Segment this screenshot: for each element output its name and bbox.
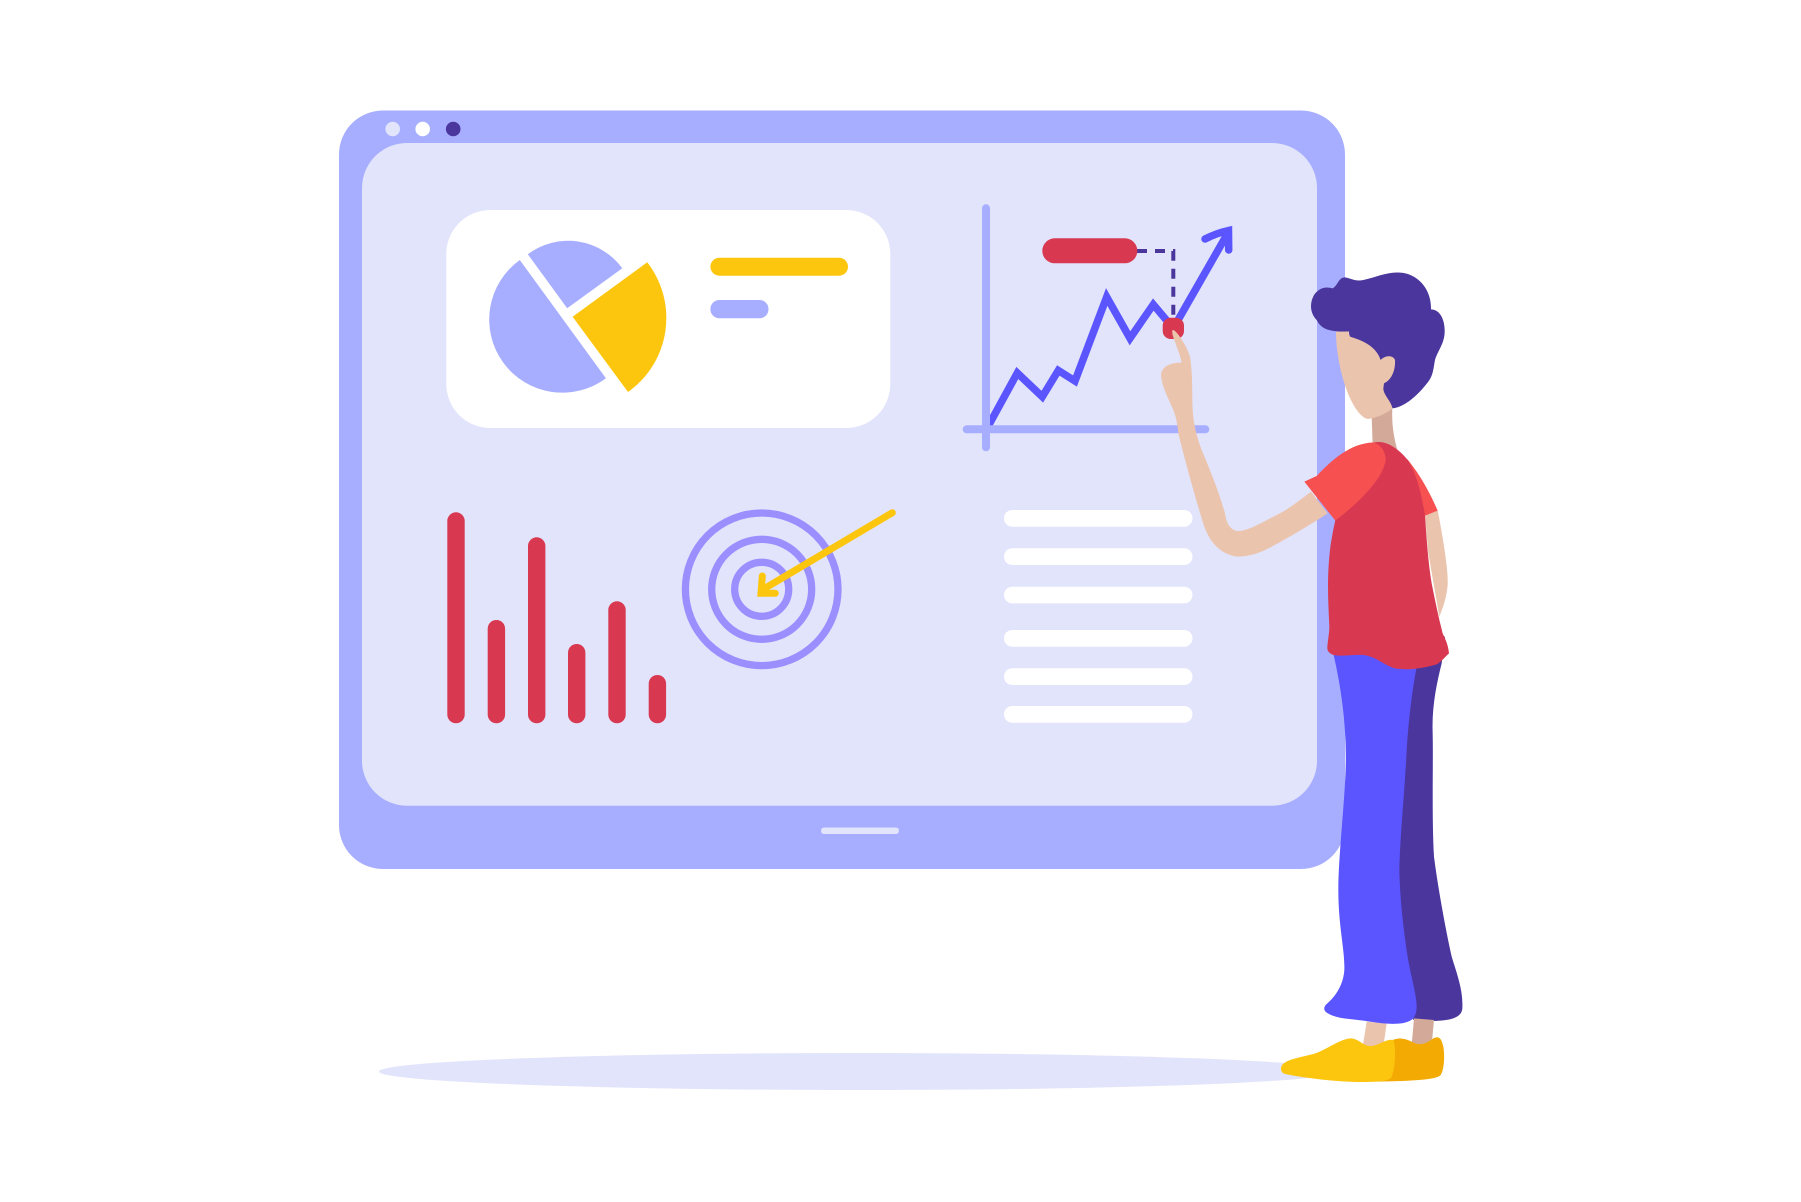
target arrow (761, 513, 892, 593)
legs and shoes (1281, 637, 1462, 1082)
text placeholder lines (1004, 510, 1192, 723)
upper body (1161, 273, 1449, 669)
panel: pie chart card (446, 210, 890, 428)
back shoe (1377, 1037, 1444, 1082)
card background (446, 210, 890, 428)
ground shadow (379, 1053, 1339, 1090)
front sleeve (1304, 442, 1386, 521)
window frame (339, 110, 1345, 869)
axes (963, 204, 1209, 451)
front shoe (1281, 1038, 1395, 1082)
target icon (685, 513, 892, 666)
data point (1163, 318, 1184, 339)
trend line (985, 231, 1229, 432)
label pill (1042, 238, 1137, 263)
bar chart (447, 512, 666, 723)
neck (1372, 408, 1398, 453)
window controls (385, 122, 461, 136)
back arm (1425, 510, 1448, 617)
ankles (1363, 1018, 1434, 1047)
legend bars (710, 258, 848, 318)
front arm and pointing hand (1161, 330, 1328, 557)
browser window (339, 110, 1345, 869)
pie chart (489, 241, 666, 393)
line chart (963, 204, 1229, 451)
torso shirt (1327, 442, 1449, 669)
person (1161, 273, 1462, 1082)
hair (1311, 273, 1445, 408)
face and ear (1336, 332, 1395, 419)
front leg (1324, 637, 1420, 1024)
home indicator (821, 828, 899, 834)
back leg (1390, 637, 1462, 1021)
screen area (362, 143, 1317, 806)
target rings (685, 513, 838, 666)
back sleeve (1407, 458, 1438, 516)
dashed leader (1137, 251, 1173, 318)
trend arrowhead (1205, 230, 1229, 250)
